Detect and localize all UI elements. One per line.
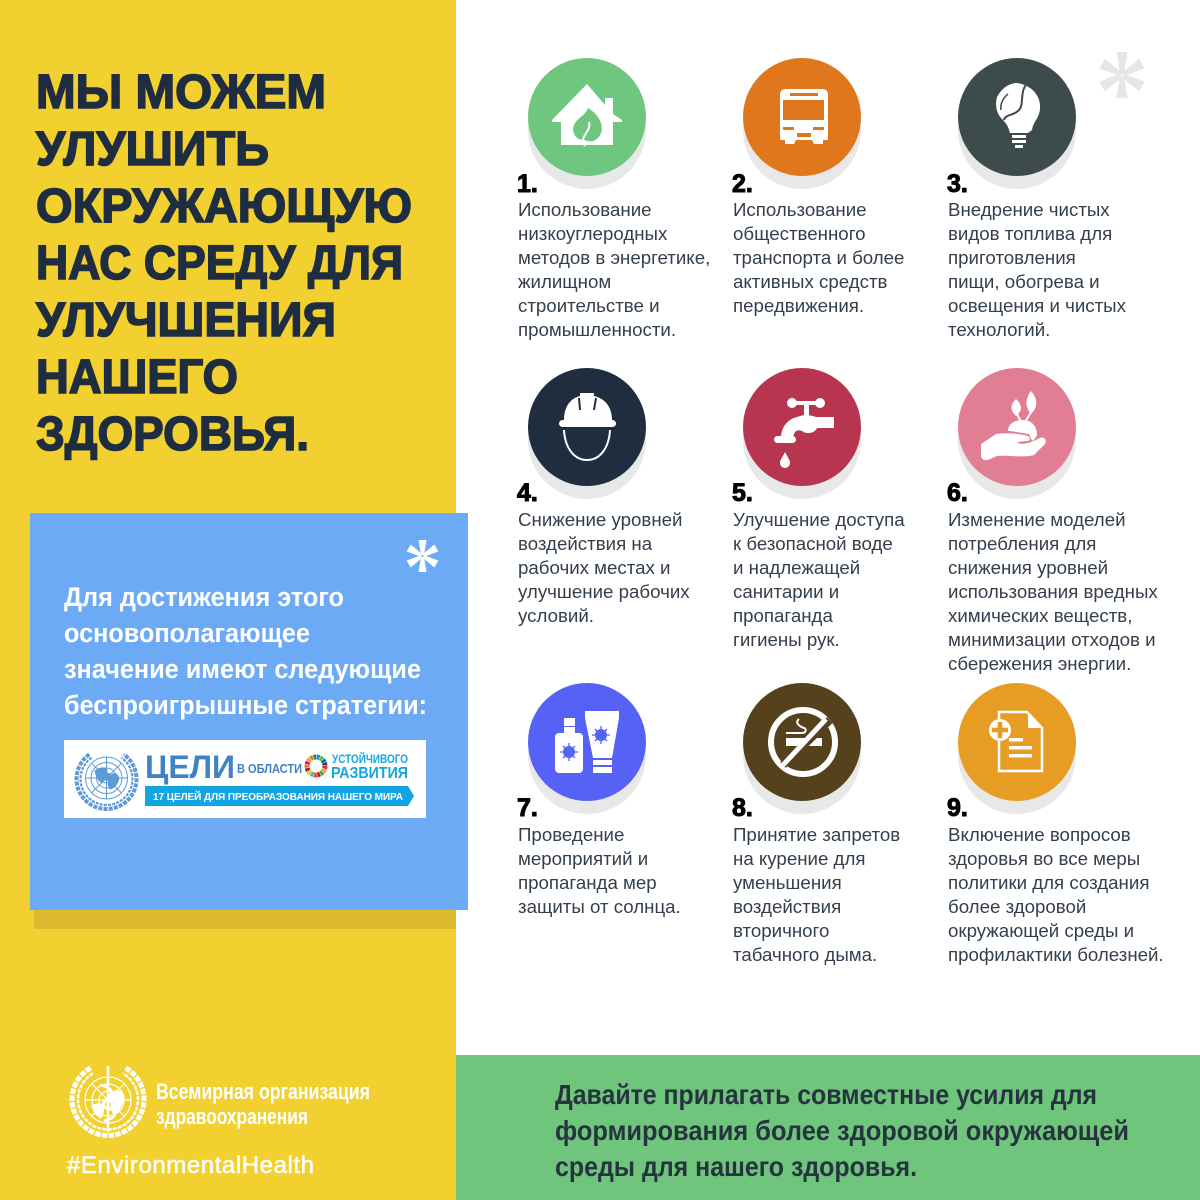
number: 2. xyxy=(732,170,753,198)
strategy 5 xyxy=(732,368,905,650)
number: 3. xyxy=(947,170,968,198)
strategies text: значение имеют следующие xyxy=(64,654,421,684)
description: вторичного xyxy=(733,920,829,941)
icon: leaf light bulb xyxy=(958,58,1076,189)
logo text: goals: ЦЕЛИ xyxy=(145,749,235,785)
description xyxy=(948,199,1127,340)
icon: hard hat xyxy=(528,368,646,499)
description: пропаганда мер xyxy=(518,872,657,893)
description: Включение вопросов xyxy=(948,824,1131,845)
description: Использование xyxy=(733,199,867,220)
panel: yellow left column xyxy=(0,0,456,1200)
description: Изменение моделей xyxy=(948,509,1126,530)
description: использования вредных xyxy=(948,581,1158,602)
description: низкоуглеродных xyxy=(518,223,668,244)
description: уменьшения xyxy=(733,872,842,893)
description: минимизации отходов и xyxy=(948,629,1156,650)
icon: bus xyxy=(743,58,861,189)
strategy 7 xyxy=(517,683,681,917)
number: 7. xyxy=(517,794,538,822)
description xyxy=(733,824,900,965)
description: общественного xyxy=(733,223,866,244)
description: профилактики болезней. xyxy=(948,944,1164,965)
strategy 6 xyxy=(947,368,1158,674)
description: защиты от солнца. xyxy=(518,896,681,917)
description: воздействия на xyxy=(518,533,653,554)
description: Принятие запретов xyxy=(733,824,900,845)
strategy 2 xyxy=(732,58,904,316)
title: НАС СРЕДУ ДЛЯ xyxy=(36,237,403,290)
asterisk: grey decoration top right xyxy=(1099,52,1145,98)
description: Внедрение чистых xyxy=(948,199,1110,220)
icon: water tap and drop xyxy=(743,368,861,499)
SDG colour wheel xyxy=(307,757,325,775)
title: МЫ МОЖЕМ xyxy=(36,66,326,119)
strategy 3 xyxy=(947,58,1127,340)
description: строительстве и xyxy=(518,295,660,316)
description: условий. xyxy=(518,605,594,626)
description: рабочих местах и xyxy=(518,557,670,578)
number: 9. xyxy=(947,794,968,822)
WHO name: Всемирная организация xyxy=(156,1079,370,1104)
description xyxy=(948,824,1164,965)
description: потребления для xyxy=(948,533,1096,554)
description: улучшение рабочих xyxy=(518,581,690,602)
icon: house with leaf xyxy=(528,58,646,189)
description: технологий. xyxy=(948,319,1050,340)
strategy 1 xyxy=(517,58,710,340)
description: Снижение уровней xyxy=(518,509,682,530)
description: снижения уровней xyxy=(948,557,1108,578)
WHO name: здравоохранения xyxy=(156,1104,308,1129)
icon: UN emblem xyxy=(76,754,137,809)
logo text: sustainable development: УСТОЙЧИВОГО xyxy=(332,753,408,766)
description xyxy=(948,509,1158,674)
icon: document with medical cross xyxy=(958,683,1076,814)
description: к безопасной воде xyxy=(733,533,893,554)
description xyxy=(518,509,690,626)
hashtag: #EnvironmentalHealth xyxy=(67,1152,314,1179)
strategies text: беспроигрышные стратегии: xyxy=(64,690,427,720)
number: 6. xyxy=(947,479,968,507)
description: промышленности. xyxy=(518,319,676,340)
title: НАШЕГО xyxy=(36,351,238,404)
icon: hand with sprout xyxy=(958,368,1076,499)
description xyxy=(518,824,681,917)
number: 4. xyxy=(517,479,538,507)
title: УЛУЧШЕНИЯ xyxy=(36,294,336,347)
description: Использование xyxy=(518,199,652,220)
description: санитарии и xyxy=(733,581,839,602)
title: УЛУШИТЬ xyxy=(36,123,269,176)
description: гигиены рук. xyxy=(733,629,840,650)
description: приготовления xyxy=(948,247,1076,268)
description: окружающей среды и xyxy=(948,920,1134,941)
description: методов в энергетике, xyxy=(518,247,710,268)
description: Улучшение доступа xyxy=(733,509,905,530)
description: воздействия xyxy=(733,896,841,917)
number: 8. xyxy=(732,794,753,822)
strategies text xyxy=(64,582,427,720)
SDG banner xyxy=(64,740,426,818)
panel: green call to action: среды для нашего здоровья. xyxy=(555,1151,917,1182)
description: пропаганда xyxy=(733,605,833,626)
description: жилищном xyxy=(518,271,611,292)
title xyxy=(36,66,412,461)
strategy 9 xyxy=(947,683,1164,965)
panel: green call to action: Давайте прилагать совместные усилия для xyxy=(555,1079,1097,1110)
description: мероприятий и xyxy=(518,848,648,869)
title: ОКРУЖАЮЩУЮ xyxy=(36,180,412,233)
arrow ribbon xyxy=(145,786,414,806)
description: более здоровой xyxy=(948,896,1086,917)
description: видов топлива для xyxy=(948,223,1112,244)
description: здоровья во все меры xyxy=(948,848,1140,869)
number: 5. xyxy=(732,479,753,507)
number: 1. xyxy=(517,170,538,198)
panel: blue strategies box xyxy=(30,513,468,929)
strategies text: Для достижения этого xyxy=(64,582,344,612)
description: политики для создания xyxy=(948,872,1149,893)
description: химических веществ, xyxy=(948,605,1132,626)
description: передвижения. xyxy=(733,295,864,316)
description: табачного дыма. xyxy=(733,944,877,965)
description: активных средств xyxy=(733,271,888,292)
description xyxy=(733,509,905,650)
strategy 4 xyxy=(517,368,690,626)
icon: no smoking xyxy=(743,683,861,814)
strategy 8 xyxy=(732,683,900,965)
SDG banner: В ОБЛАСТИ xyxy=(237,762,302,776)
icon: WHO emblem xyxy=(72,1066,144,1135)
description: Проведение xyxy=(518,824,624,845)
description: на курение для xyxy=(733,848,865,869)
logo: WHO xyxy=(72,1066,370,1135)
asterisk: white xyxy=(407,540,438,572)
panel: green call to action: формирования более здоровой окружающей xyxy=(555,1115,1129,1146)
strategies text: основополагающее xyxy=(64,618,310,648)
arrow ribbon: 17 ЦЕЛЕЙ ДЛЯ ПРЕОБРАЗОВАНИЯ НАШЕГО МИРА xyxy=(153,790,403,803)
description: и надлежащей xyxy=(733,557,860,578)
description xyxy=(733,199,904,316)
description: сбережения энергии. xyxy=(948,653,1131,674)
title: ЗДОРОВЬЯ. xyxy=(36,408,309,461)
logo text: sustainable development: РАЗВИТИЯ xyxy=(331,765,408,782)
description: транспорта и более xyxy=(733,247,904,268)
description xyxy=(518,199,710,340)
panel: green call to action xyxy=(456,1055,1200,1200)
WHO name xyxy=(156,1079,370,1129)
icon: sunscreen xyxy=(528,683,646,814)
description: пищи, обогрева и xyxy=(948,271,1100,292)
description: освещения и чистых xyxy=(948,295,1127,316)
logo text: sustainable development xyxy=(331,753,408,782)
